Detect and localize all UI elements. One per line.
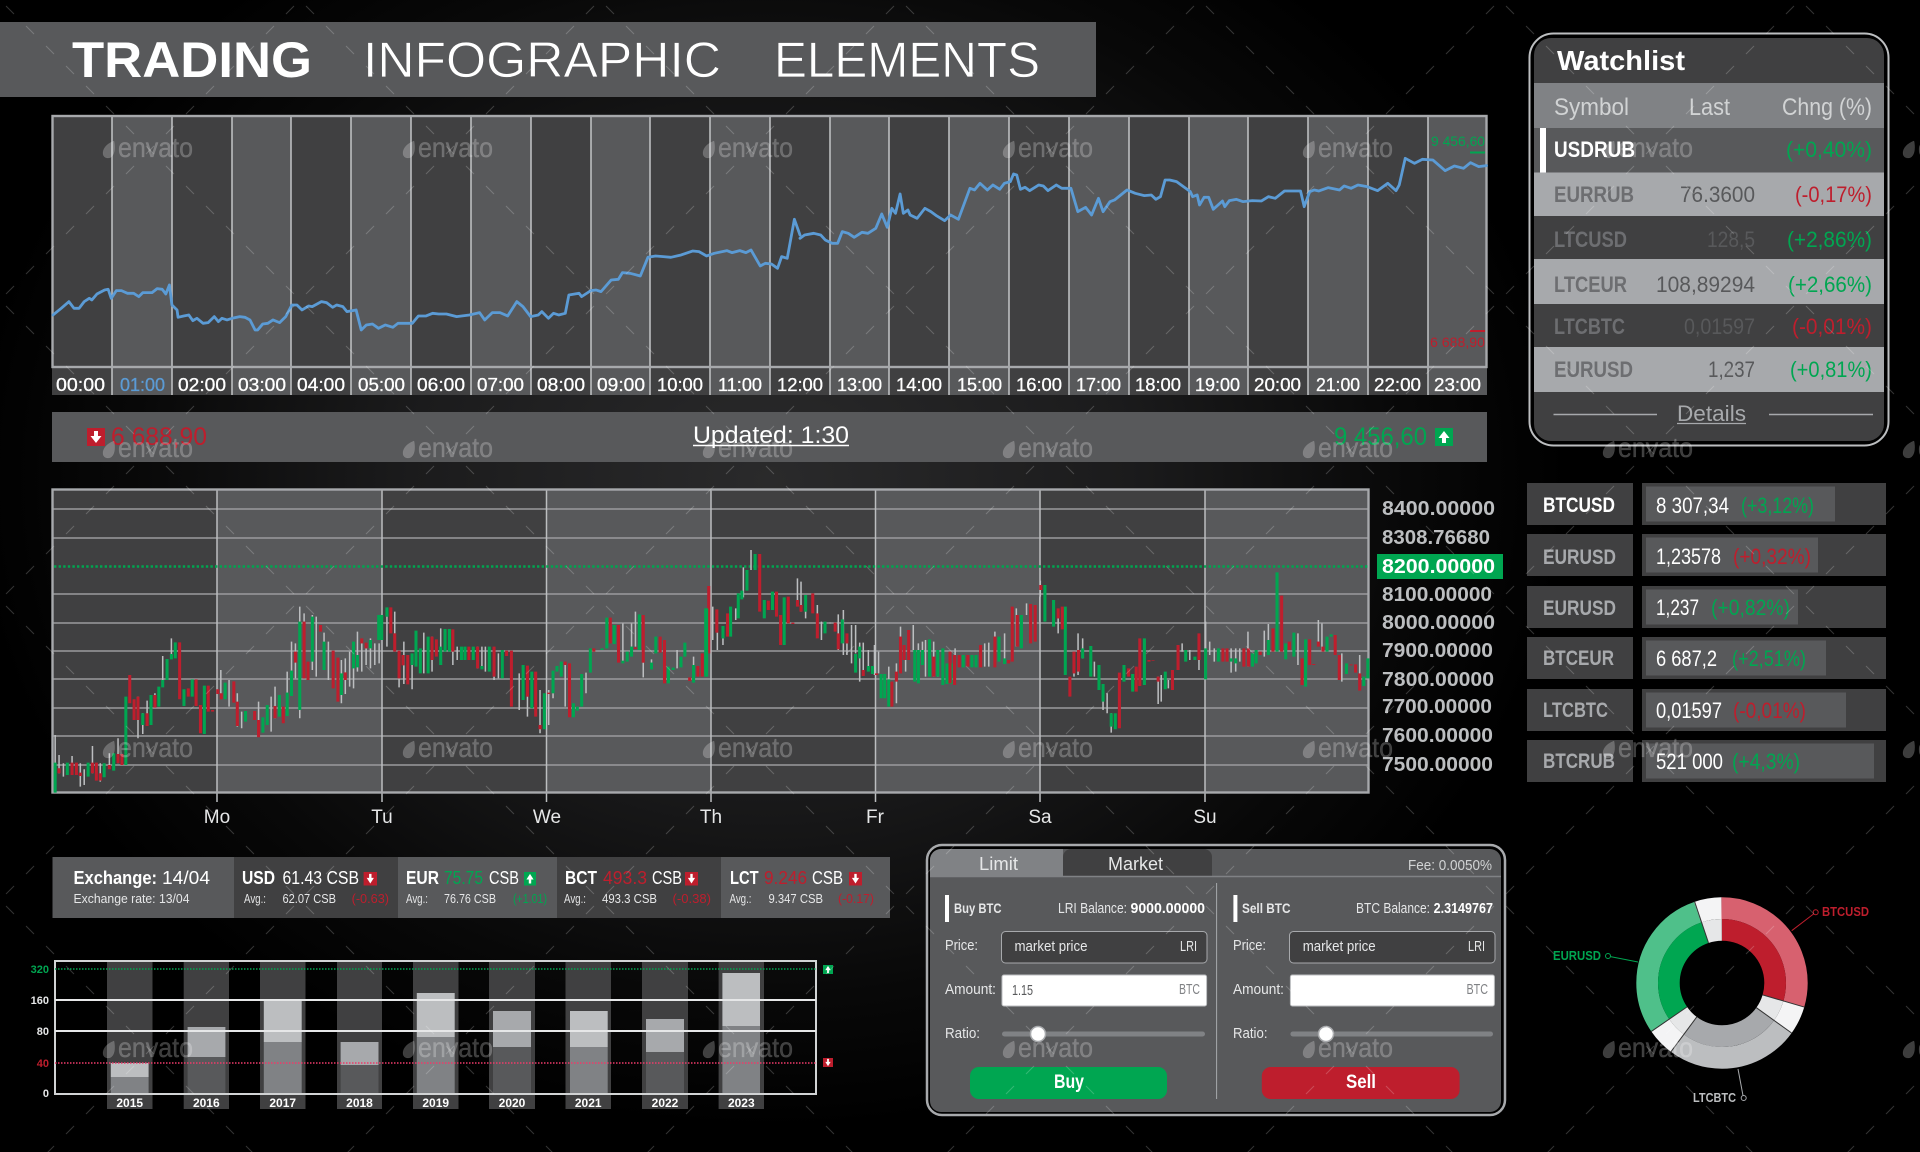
hour axis labels: 11:00 [718,375,762,395]
watermark layer: envato [1318,732,1393,763]
hour axis labels: 19:00 [1195,375,1240,395]
price axis labels: 8400.00000 [1382,498,1495,520]
table header [1534,83,1884,128]
watermark layer: envato [418,732,493,763]
day axis labels: We [533,807,561,828]
candlestick chart panel [52,489,1503,828]
sell form: 2.3149767 [1434,900,1493,917]
callout: EURUSD: EURUSD [1553,948,1601,963]
year labels: 2023 [728,1096,755,1110]
panel: exchange rates band: 493.3 [603,868,647,888]
high and low markers: 6 688,90 [1430,334,1485,350]
panel: exchange rates band: 61.43 CSB [282,868,359,888]
price axis labels: 7800.00000 [1382,669,1494,691]
watermark layer: envato [418,132,493,163]
bar chart: yearly values [31,961,833,1110]
price axis labels: 8200.00000 [1382,556,1495,578]
buy form: 9000.00000 [1130,900,1205,917]
title banner: TRADING [72,32,312,88]
watermark layer: envato [1318,132,1393,163]
day axis labels: Sa [1028,807,1052,828]
hour axis labels [56,375,1481,395]
panel: exchange rates band: 14/04 [162,868,210,888]
table header: Symbol [1554,94,1629,121]
day axis labels: Fr [866,807,885,828]
table rows: (+0,40%) [1786,137,1872,162]
y axis labels: 320 [31,964,49,976]
hour axis labels: 22:00 [1374,375,1421,395]
hour axis labels: 14:00 [896,375,942,395]
watermark layer: envato [118,732,193,763]
panel: ticker rows: (+4,3%) [1732,749,1800,774]
status bar: updated, low, high: Updated: 1:30 [693,422,849,449]
hour axis labels: 18:00 [1135,375,1181,395]
donut rings [1647,908,1797,1058]
table rows: EURUSD [1554,357,1633,382]
table rows: USDRUB [1554,137,1635,162]
day axis labels: Th [700,807,722,828]
panel: ticker rows: 0,01597 [1656,698,1722,723]
year labels: 2020 [499,1096,526,1110]
panel: ticker rows [1527,483,1886,782]
panel: exchange rates band: EUR [406,868,439,888]
tabs: Market [1108,854,1163,874]
watermark layer: envato [1018,432,1093,463]
watermark layer: envato [1318,1032,1393,1063]
table rows: LTCBTC [1554,314,1625,339]
buy form: Price: [945,937,978,954]
buy form: LRI [1180,938,1197,955]
panel: ticker rows: (+0,82%) [1711,595,1790,620]
hour axis labels: 17:00 [1076,375,1121,395]
watermark layer: envato [718,432,793,463]
buy form: Amount: [945,981,996,998]
price axis labels: 7600.00000 [1382,725,1493,747]
watermark layer [103,132,1920,1063]
panel: ticker rows: 1,23578 [1656,544,1721,569]
table rows [1534,128,1884,392]
buy form: 1.15 [1012,982,1033,999]
watermark layer: envato [118,432,193,463]
donut chart [1553,902,1869,1105]
title banner: ELEMENTS [774,32,1040,88]
table rows: 1,237 [1708,357,1755,382]
tabs [930,849,1501,876]
price axis labels: 8100.00000 [1382,584,1492,606]
hour axis labels: 16:00 [1016,375,1062,395]
watermark layer: envato [718,1032,793,1063]
stacked bars [111,973,760,1094]
hour axis labels: 01:00 [120,375,165,395]
callout: BTCUSD [1792,904,1869,931]
sell form: LRI [1468,938,1485,955]
day axis labels [204,807,1217,828]
hour axis labels: 07:00 [477,375,524,395]
high and low markers: 9 456,60 [1431,133,1485,149]
sell form: Sell [1346,1072,1376,1093]
table rows: (+0,81%) [1790,357,1872,382]
panel: exchange rates band: 75.75 [444,868,483,888]
table rows: (-0,01%) [1792,314,1872,339]
hour axis labels: 02:00 [178,375,226,395]
year labels: 2018 [346,1096,373,1110]
buy form: BTC [1179,981,1200,998]
sell form: market price [1303,938,1376,955]
panel: exchange rates band: Avg.: [244,892,266,906]
panel: exchange rates band: Avg.: [730,892,752,906]
table rows: 128,5 [1707,227,1755,252]
panel: exchange rates band: 9.246 [764,868,807,888]
hour axis labels: 21:00 [1316,375,1360,395]
icon: green up arrow [1435,428,1453,446]
panel: exchange rates band: LCT [730,868,759,888]
year labels: 2016 [193,1096,220,1110]
candles Monday to Thursday [55,586,709,793]
panel: exchange rates band: BCT [565,868,597,888]
hour axis labels: 10:00 [657,375,703,395]
watermark layer: envato [1018,132,1093,163]
panel: ticker rows: BTCUSD [1543,494,1615,517]
table rows: 0,01597 [1684,314,1755,339]
table rows: 76.3600 [1680,182,1755,207]
year labels: 2017 [269,1096,296,1110]
table rows: (-0,17%) [1795,182,1872,207]
title banner: INFOGRAPHIC [363,32,721,88]
title banner [0,22,1096,97]
panel: ticker rows: 6 687,2 [1656,646,1717,671]
panel: exchange rates band: Avg.: [564,892,586,906]
callout: EURUSD [1553,948,1638,963]
price axis labels: 7500.00000 [1382,754,1493,776]
hour axis labels: 20:00 [1254,375,1301,395]
panel: ticker rows: 8 307,34 [1656,493,1729,518]
buy form: LRI Balance: [1058,900,1127,917]
icon: red down arrow [87,428,105,446]
hour axis labels: 23:00 [1434,375,1481,395]
sell form: Price: [1233,937,1266,954]
panel: ticker rows: EURUSD [1543,597,1616,620]
panel: exchange rates band [52,857,890,918]
icons: trend arrows [364,872,862,886]
watermark layer: envato [718,132,793,163]
table header: Last [1689,94,1730,121]
day axis labels: Mo [204,807,230,828]
buy form: market price [1014,938,1088,955]
panel: ticker rows: BTCRUB [1543,750,1615,773]
panel: exchange rates band: 62.07 CSB [282,892,336,906]
panel: exchange rates band: CSB [812,868,843,888]
watermark layer: envato [1018,732,1093,763]
hour axis labels: 06:00 [417,375,465,395]
table rows: 108,89294 [1656,272,1755,297]
panel: exchange rates band: (-0.17) [838,892,874,906]
hour axis labels: 00:00 [56,375,105,395]
panel: order form [927,845,1505,1115]
y axis labels: 160 [31,995,49,1007]
price axis labels: 7700.00000 [1382,696,1492,718]
panel: ticker rows: (-0,01%) [1733,698,1806,723]
y axis labels: 80 [37,1026,49,1038]
high and low markers [1430,133,1485,350]
sell form: Sell BTC [1242,900,1290,916]
year labels [116,1096,755,1110]
watermark layer: envato [1618,1032,1693,1063]
sell form: Ratio: [1233,1025,1268,1042]
panel: exchange rates band: (-0.38) [672,892,711,906]
year labels: 2015 [116,1096,143,1110]
callout: BTCUSD: BTCUSD [1822,904,1869,919]
panel: exchange rates band: (+1.01) [513,892,547,906]
sell form: BTC Balance: [1356,900,1430,917]
hour axis labels: 08:00 [537,375,585,395]
panel: watchlist [1530,34,1888,446]
line chart panel: 24 hour price [52,115,1487,395]
table rows: (+2,66%) [1788,272,1872,297]
buy form: Buy [1054,1072,1084,1093]
day axis labels: Su [1193,807,1217,828]
buy form [945,895,1207,1099]
panel: ticker rows: (+0,32%) [1733,544,1811,569]
panel: exchange rates band: Avg.: [406,892,428,906]
hour axis labels: 13:00 [837,375,882,395]
watermark layer: envato [418,432,493,463]
y axis labels [31,964,49,1100]
panel: exchange rates band: CSB [489,868,519,888]
status bar: updated, low, high: 9 456,60 [1334,423,1427,451]
table rows: (+2,86%) [1787,227,1872,252]
panel: ticker rows: BTCEUR [1543,647,1614,670]
watermark layer: envato [1318,432,1393,463]
panel: exchange rates band: Exchange: [74,868,157,888]
buy form: Buy BTC [954,900,1002,916]
hour axis labels: 12:00 [777,375,823,395]
y axis labels: 0 [43,1088,49,1100]
panel: exchange rates band: 76.76 CSB [444,892,496,906]
panel: ticker rows: 521 000 [1656,749,1723,774]
watermark layer: envato [1018,1032,1093,1063]
panel: ticker rows: LTCBTC [1543,699,1608,722]
panel: ticker rows: (+2,51%) [1732,646,1806,671]
table rows: LTCEUR [1554,272,1627,297]
watermark layer: envato [718,732,793,763]
sell form: Amount: [1233,981,1284,998]
panel: exchange rates band: 493.3 CSB [602,892,657,906]
watermark layer: envato [1618,732,1693,763]
status bar: updated, low, high [52,412,1487,462]
callout: LTCBTC [1693,1069,1746,1105]
year labels: 2021 [575,1096,602,1110]
hour axis labels: 05:00 [358,375,405,395]
tabs: Fee: 0.0050% [1408,857,1492,874]
hour axis labels: 15:00 [957,375,1002,395]
price axis labels: 8000.00000 [1382,612,1495,634]
panel: watchlist: Watchlist [1557,45,1685,76]
panel: ticker rows: (+3,12%) [1741,493,1814,518]
table header: Chng (%) [1782,94,1872,121]
donut separators [1651,902,1804,1052]
watermark layer: envato [1618,432,1693,463]
panel: exchange rates band: 9.347 CSB [768,892,823,906]
price axis labels [1377,498,1503,776]
year labels: 2019 [422,1096,449,1110]
table rows: LTCUSD [1554,227,1627,252]
panel: exchange rates band: (-0.63) [352,892,389,906]
watermark layer: envato [118,1032,193,1063]
hour axis labels: 04:00 [297,375,345,395]
price axis labels: 8308.76680 [1382,527,1490,549]
year labels: 2022 [652,1096,679,1110]
sell form [1233,895,1495,1099]
panel: exchange rates band: Exchange rate: 13/04 [74,892,190,906]
threshold arrows [823,965,833,1067]
tabs: Limit [979,854,1018,874]
panel: exchange rates band: CSB [652,868,682,888]
day axis labels: Tu [371,807,393,828]
watermark layer: envato [1618,132,1693,163]
status bar: updated, low, high: 6 688,90 [111,423,207,451]
panel: ticker rows: 1,237 [1656,595,1699,620]
hour axis labels: 03:00 [238,375,286,395]
watermark layer: envato [418,1032,493,1063]
price axis labels: 7900.00000 [1382,640,1493,662]
hour axis labels: 09:00 [597,375,645,395]
buy form: Ratio: [945,1025,980,1042]
panel: ticker rows: EURUSD [1543,546,1616,569]
details link: Details [1677,401,1746,426]
y axis labels: 40 [37,1058,49,1070]
watermark layer: envato [118,132,193,163]
table rows: EURRUB [1554,182,1634,207]
candles Thursday to Sunday [707,550,1368,733]
callout: LTCBTC: LTCBTC [1693,1090,1737,1105]
sell form: BTC [1466,981,1488,998]
price line [53,158,1487,330]
panel: exchange rates band: USD [242,868,275,888]
